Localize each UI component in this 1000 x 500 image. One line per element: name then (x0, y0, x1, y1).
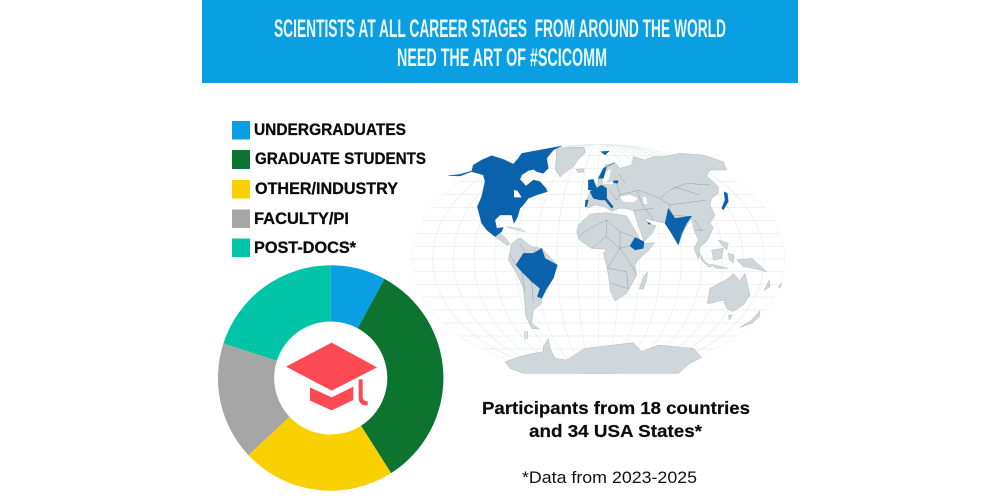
title (274, 15, 726, 72)
title: NEED THE ART OF #SCICOMM (397, 44, 607, 72)
France, Germany, Italy (590, 185, 613, 208)
Poland (613, 181, 618, 183)
map graticule (410, 144, 787, 374)
Africa (577, 213, 655, 301)
segment: graduate students (358, 279, 443, 473)
country borders (510, 173, 710, 302)
Southeast Asia, Oceania (698, 240, 782, 327)
Madagascar (639, 272, 648, 289)
participants text (482, 398, 750, 441)
Brazil (516, 248, 557, 298)
Antarctica (505, 338, 702, 373)
legend item: faculty/PI: FACULTY/PI (254, 210, 349, 228)
participants text: and 34 USA States* (529, 421, 702, 441)
Japan (722, 192, 728, 210)
North America (448, 146, 562, 237)
legend (232, 121, 426, 257)
segment: undergraduates (331, 265, 384, 328)
header banner (202, 0, 798, 83)
United Kingdom (588, 179, 597, 190)
South America (508, 238, 557, 329)
data footnote: *Data from 2023-2025 (522, 468, 697, 487)
highlighted countries (448, 146, 728, 298)
legend item: undergraduates: UNDERGRADUATES (254, 121, 406, 139)
segment: other/industry (248, 417, 391, 491)
Central America (495, 233, 510, 245)
segment: post-docs (223, 265, 331, 361)
Portugal (585, 200, 588, 207)
legend item: graduate students: GRADUATE STUDENTS (255, 150, 426, 168)
UAE (647, 222, 651, 225)
segment: faculty/PI (218, 343, 290, 455)
Svalbard (601, 151, 609, 155)
faint map control mark (524, 331, 528, 339)
legend item: post-docs: POST-DOCS* (254, 239, 357, 257)
Scandinavia (598, 163, 615, 178)
Ethiopia (630, 237, 644, 250)
gray land masses (495, 147, 782, 373)
Greenland (555, 147, 585, 177)
Eurasia (587, 153, 727, 259)
legend item: other/industry: OTHER/INDUSTRY (255, 180, 398, 198)
icon: graduation cap (286, 343, 377, 410)
India (665, 208, 692, 245)
donut chart (218, 265, 443, 491)
world map (410, 144, 787, 374)
participants text: Participants from 18 countries (482, 398, 750, 418)
